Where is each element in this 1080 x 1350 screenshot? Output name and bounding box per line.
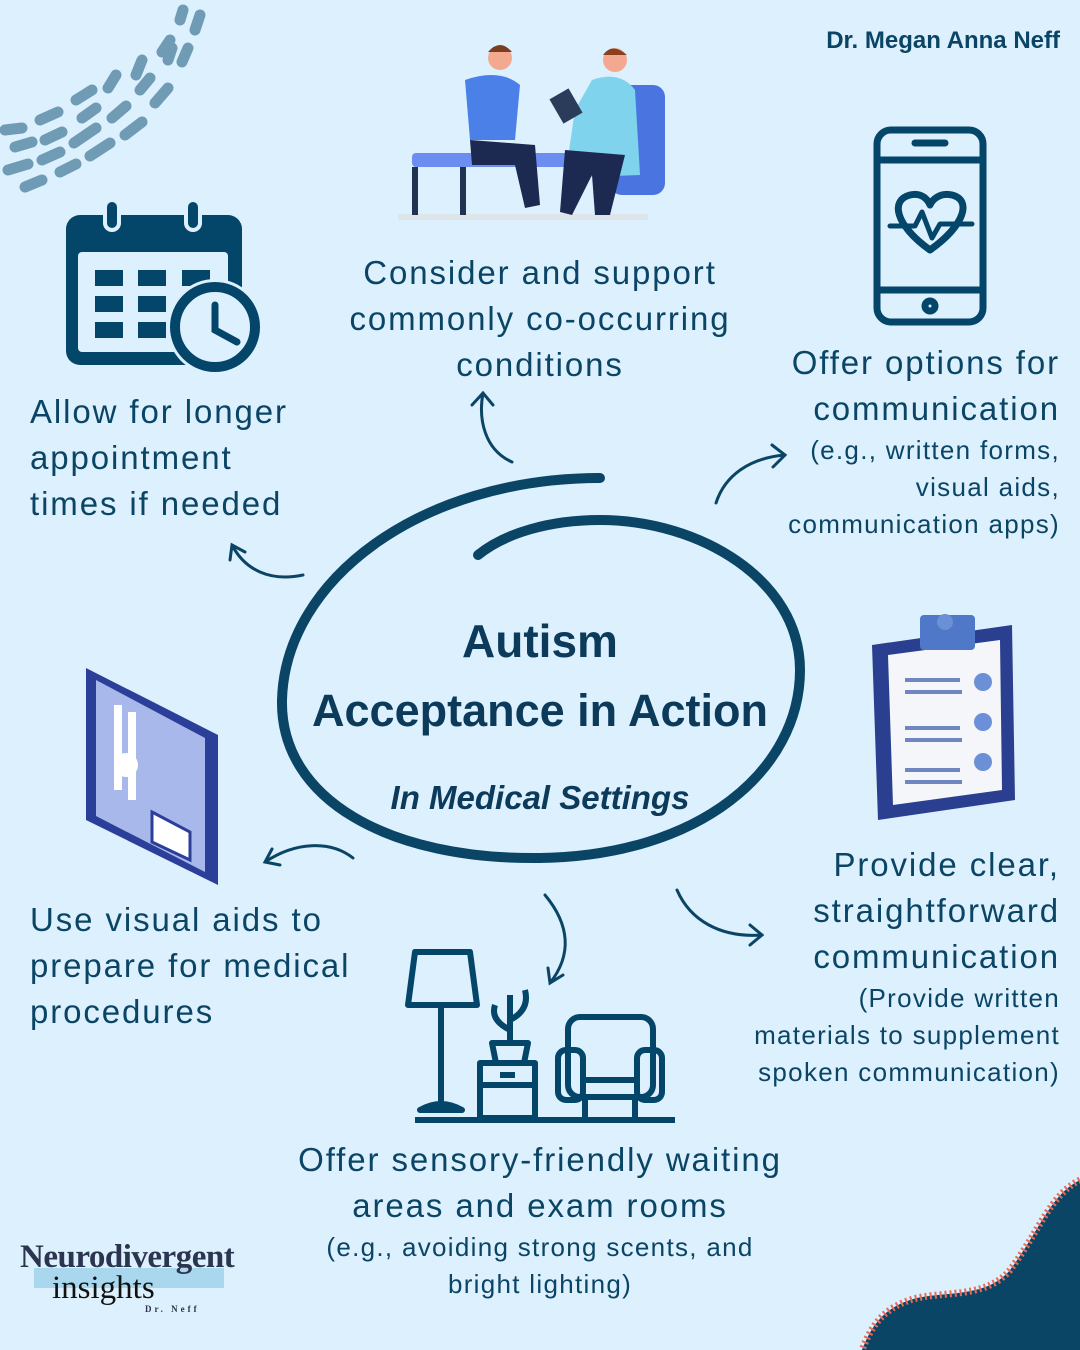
title block: Autism (462, 615, 618, 667)
text: clear communication: materials to supplement (754, 1020, 1060, 1050)
icon: clipboard (872, 614, 1015, 820)
logo: Dr. Neff (145, 1304, 200, 1314)
text: communication options: visual aids, (916, 472, 1060, 502)
text: clear communication (754, 846, 1060, 1087)
text: clear communication: communication (813, 938, 1060, 975)
text: communication options: Offer options for (792, 344, 1060, 381)
logo (20, 1239, 235, 1314)
logo: insights (52, 1270, 155, 1306)
text: communication options: communication apps) (788, 509, 1060, 539)
text: communication options (788, 344, 1060, 539)
text: appointment times: appointment (30, 439, 233, 476)
text: visual aids: Use visual aids to (30, 901, 323, 938)
text: sensory-friendly: areas and exam rooms (352, 1187, 728, 1224)
text: visual aids: procedures (30, 993, 214, 1030)
arrows (230, 393, 785, 983)
icon: x-ray (86, 668, 218, 885)
text: clear communication: straightforward (813, 892, 1060, 929)
decorative dashes (5, 10, 200, 187)
text: communication options: (e.g., written forms, (810, 435, 1060, 465)
corner blob (862, 1180, 1080, 1350)
text: appointment times: Allow for longer (30, 393, 288, 430)
text: clear communication: Provide clear, (833, 846, 1060, 883)
text: co-occurring: commonly co-occurring (349, 300, 730, 337)
text: sensory-friendly: Offer sensory-friendly waiting (298, 1141, 782, 1178)
text: co-occurring (349, 254, 730, 383)
text: appointment times: times if needed (30, 485, 282, 522)
icon: smartphone heart (877, 130, 983, 322)
text: visual aids (30, 901, 350, 1030)
text: visual aids: prepare for medical (30, 947, 350, 984)
text: sensory-friendly: (e.g., avoiding strong scents, and (326, 1232, 754, 1262)
text: communication options: communication (813, 390, 1060, 427)
text: clear communication: (Provide written (859, 983, 1060, 1013)
logo: Neurodivergent (20, 1239, 234, 1275)
icon: waiting room furniture (408, 952, 675, 1120)
text: clear communication: spoken communication) (758, 1057, 1060, 1087)
text: appointment times (30, 393, 288, 522)
icon: doctor and patient (398, 45, 665, 220)
title block (312, 615, 768, 816)
ellipse: central frame (282, 478, 800, 858)
author name: Dr. Megan Anna Neff (826, 27, 1060, 54)
title block: Acceptance in Action (312, 685, 768, 736)
icon: calendar with clock (66, 200, 263, 375)
text: sensory-friendly: bright lighting) (448, 1269, 632, 1299)
text: co-occurring: Consider and support (363, 254, 717, 291)
text: sensory-friendly (298, 1141, 782, 1299)
text: co-occurring: conditions (456, 346, 624, 383)
title block: In Medical Settings (391, 779, 689, 816)
